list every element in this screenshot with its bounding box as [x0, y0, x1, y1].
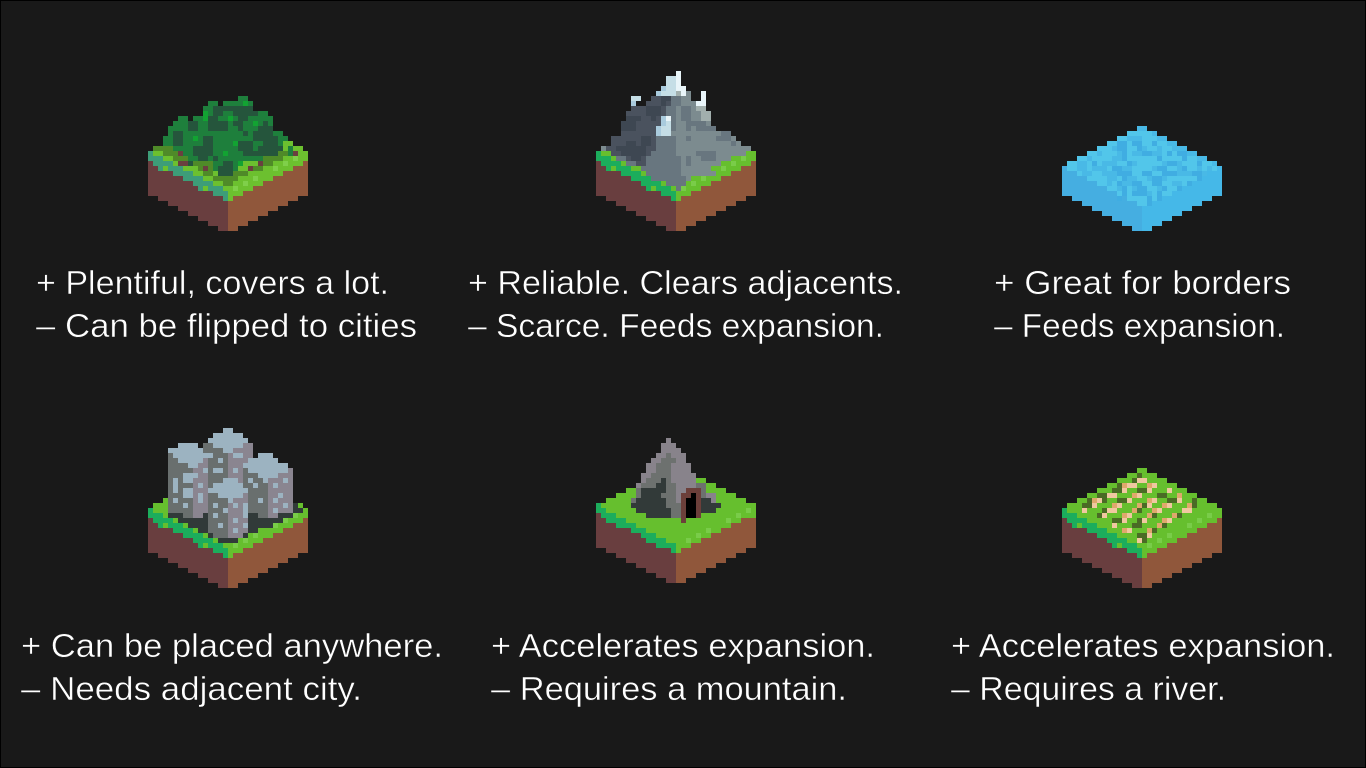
cave door: [681, 490, 701, 520]
text: forest pros and cons: – Can be flipped to cities: [36, 307, 417, 344]
text: city pros and cons: + Can be placed anywhere.: [21, 627, 443, 664]
text: water pros and cons: [994, 264, 1291, 344]
text: forest pros and cons: [36, 264, 417, 344]
panel: forest: [36, 98, 417, 344]
text: water pros and cons: + Great for borders: [994, 264, 1291, 301]
panel: farm: [951, 468, 1335, 707]
text: cave pros and cons: [491, 627, 875, 707]
panel: cave: [491, 440, 875, 707]
panel: city: [21, 430, 443, 707]
text: cave pros and cons: – Requires a mountain.: [491, 670, 847, 707]
text: city pros and cons: [21, 627, 443, 707]
text: mountain pros and cons: + Reliable. Clears adjacents.: [468, 264, 903, 301]
building: right tower: [243, 456, 293, 516]
text: farm pros and cons: + Accelerates expansion.: [951, 627, 1335, 664]
building: front tower: [208, 480, 248, 536]
building: back tower: [203, 430, 253, 510]
icon: mountain tile: [596, 74, 756, 231]
icon: city tile: [148, 430, 308, 588]
text: forest pros and cons: + Plentiful, covers a lot.: [36, 264, 389, 301]
text: farm pros and cons: [951, 627, 1335, 707]
text: farm pros and cons: – Requires a river.: [951, 670, 1226, 707]
text: water pros and cons: – Feeds expansion.: [994, 307, 1285, 344]
icon: farm tile: [1062, 468, 1222, 588]
icon: forest tile: [148, 98, 308, 231]
building: left tower: [168, 446, 213, 516]
text: city pros and cons: – Needs adjacent city.: [21, 670, 362, 707]
text: cave pros and cons: + Accelerates expansion.: [491, 627, 875, 664]
icon: water tile: [1062, 126, 1222, 231]
text: mountain pros and cons: [468, 264, 903, 344]
panel: mountain: [468, 74, 903, 344]
icon: cave tile: [596, 440, 756, 583]
text: mountain pros and cons: – Scarce. Feeds expansion.: [468, 307, 884, 344]
panel: water: [994, 126, 1291, 344]
